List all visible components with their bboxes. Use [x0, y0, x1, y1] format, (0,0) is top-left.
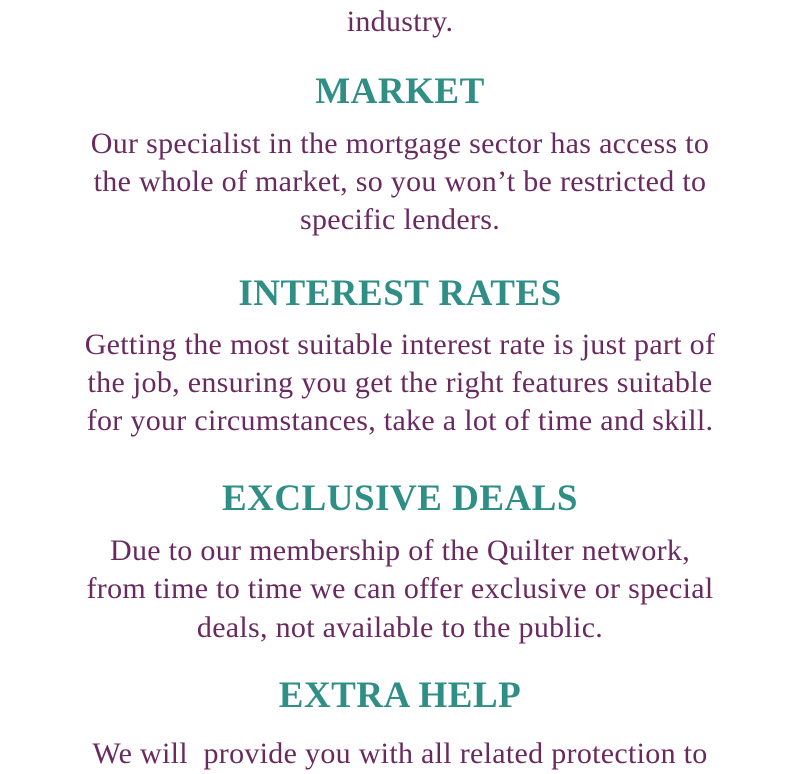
- text: exclusive deals body: [86, 534, 714, 644]
- heading: interest rates: INTEREST RATES: [238, 273, 562, 314]
- section: market: [91, 71, 709, 236]
- text: interest rates body: the job, ensuring you get the right features suitable: [88, 366, 712, 399]
- text: market body: [91, 127, 709, 236]
- text: market body: the whole of market, so you won’t be restricted to: [94, 165, 706, 198]
- text: interest rates body: [85, 328, 715, 437]
- heading: market: MARKET: [315, 71, 485, 112]
- text: exclusive deals body: deals, not available to the public.: [197, 611, 603, 644]
- text: interest rates body: Getting the most suitable interest rate is just part of: [85, 328, 715, 361]
- section: extra help: [92, 675, 708, 770]
- section: interest rates: [85, 273, 715, 437]
- text: industry (continuation): industry.: [347, 5, 453, 38]
- text: exclusive deals body: from time to time we can offer exclusive or special: [86, 572, 714, 605]
- text: interest rates body: for your circumstances, take a lot of time and skill.: [87, 404, 713, 437]
- text: market body: Our specialist in the mortgage sector has access to: [91, 127, 709, 160]
- text: market body: specific lenders.: [300, 203, 500, 236]
- text: extra help body: We will provide you with all related protection to: [92, 737, 708, 770]
- section: exclusive deals: [86, 478, 714, 644]
- text: exclusive deals body: Due to our membership of the Quilter network,: [110, 534, 690, 567]
- heading: extra help: EXTRA HELP: [279, 675, 521, 716]
- heading: exclusive deals: EXCLUSIVE DEALS: [222, 478, 578, 519]
